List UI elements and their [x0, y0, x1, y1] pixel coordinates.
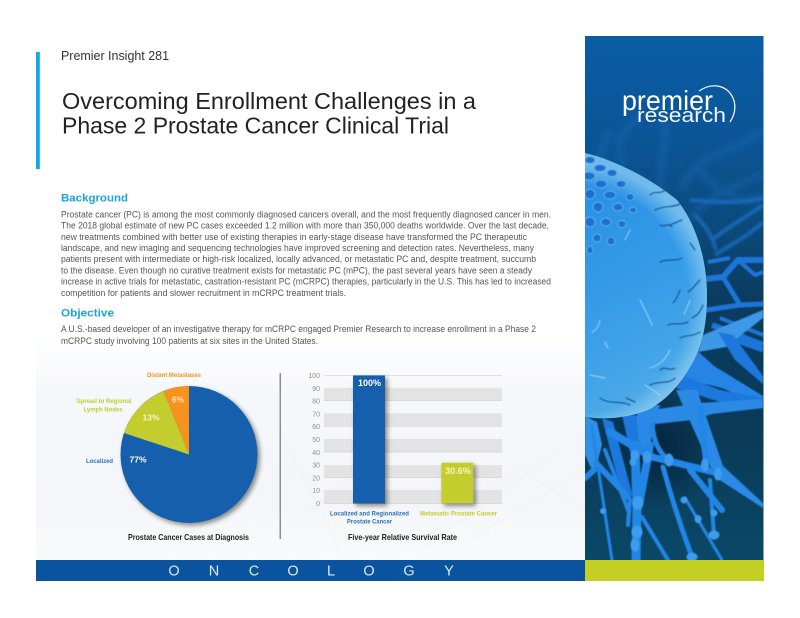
footer label: N	[209, 564, 219, 580]
logo: premier research	[622, 85, 735, 127]
footer label: C	[249, 564, 259, 580]
bar values: 100%	[358, 378, 381, 388]
bar chart: five-year relative survival rate	[308, 373, 502, 542]
text block: background: landscape, and new imaging and sequencing technologies have improved screening and detection rates. Nevertheless, many	[61, 243, 534, 253]
surface bumps	[583, 156, 636, 254]
slice labels: Distant Metastases	[147, 372, 201, 379]
text block: objective: mCRPC study involving 100 patients at six sites in the United States.	[61, 336, 318, 346]
category labels: Localized and Regionalized	[330, 510, 409, 518]
series label: Premier Insight 281	[61, 49, 169, 63]
axis values: 30	[312, 463, 320, 470]
bar caption: Five-year Relative Survival Rate	[348, 532, 457, 542]
footer label: Y	[444, 564, 454, 580]
spikes	[585, 310, 763, 508]
footer label: L	[327, 564, 335, 580]
text block: background: increase in active trials for metastatic, castration-resistant PC (mCRPC) therapies, particularly in the U.S. This has led to increased	[61, 276, 551, 286]
bar: localized	[353, 376, 385, 504]
axis values: 0	[316, 501, 320, 508]
pie slices	[120, 386, 258, 523]
axis values: 50	[312, 437, 320, 444]
heading: objective: Objective	[61, 308, 114, 320]
title: Phase 2 Prostate Cancer Clinical Trial	[62, 112, 449, 138]
footer label	[168, 564, 454, 580]
tendril nodes	[600, 450, 722, 562]
tendrils	[585, 408, 722, 560]
sphere	[585, 153, 707, 418]
bar: metastatic	[441, 463, 473, 504]
accent bar	[36, 52, 40, 169]
slice values: 77%	[129, 454, 147, 464]
axis values: 10	[312, 488, 320, 495]
slice labels: Lymph Nodes	[84, 406, 123, 414]
title: Overcoming Enrollment Challenges in a	[62, 88, 477, 114]
axis values	[308, 373, 320, 508]
axis values: 70	[312, 411, 320, 418]
footer label: G	[403, 564, 415, 580]
axis values: 90	[312, 386, 320, 393]
upper-right strands	[690, 198, 763, 255]
background network	[602, 105, 763, 220]
slice values: 6%	[172, 394, 185, 404]
text block: objective	[61, 324, 536, 346]
title	[62, 88, 477, 138]
slice values	[129, 394, 185, 464]
category labels	[330, 510, 497, 526]
axis values: 60	[312, 424, 320, 431]
text block: objective: A U.S.-based developer of an investigative therapy for mCRPC engaged Premier Research to increase enrollment in a Phase 2	[61, 324, 536, 334]
bar values	[358, 378, 471, 476]
footer label: O	[363, 564, 375, 580]
footer label: O	[168, 564, 180, 580]
image panel: cancer cell	[583, 36, 764, 562]
text block: background: patients present with intermediate or high-risk localized, locally advanced, or metastatic PC and, despite treatment, succumb	[61, 254, 536, 264]
logo: premier research: research	[637, 105, 726, 127]
footer band	[36, 560, 764, 581]
text block: background: to the disease. Even though no curative treatment exists for metastatic PC (mPC), the past several years have seen a steady	[61, 265, 532, 275]
slice labels: Spread to Regional	[76, 398, 132, 405]
axis values: 40	[312, 450, 320, 457]
logo: premier research: premier	[622, 85, 713, 116]
axis values: 20	[312, 475, 320, 482]
text block: background: The 2018 global estimate of new PC cases exceeded 1.2 million with more than 350,000 deaths worldwide. Over the last decade,	[61, 221, 549, 231]
pie chart: prostate cancer cases at diagnosis	[76, 372, 258, 542]
text block: background: new treatments combined with better use of existing therapies in early-stage disease have transformed the PC therapeutic	[61, 232, 527, 242]
surface squiggles	[600, 170, 703, 405]
text block: background: Prostate cancer (PC) is among the most commonly diagnosed cancers overall, and the most frequently diagnosed cancer in men.	[61, 210, 551, 220]
axis values: 100	[308, 373, 320, 380]
mesh strands	[706, 258, 763, 350]
axis values: 80	[312, 399, 320, 406]
chart bands	[324, 388, 502, 503]
category labels: Metastatic Prostate Cancer	[420, 510, 497, 518]
text block: background: competition for patients and slower recruitment in mCRPC treatment trials.	[61, 288, 346, 298]
slice labels	[76, 372, 201, 465]
slice labels: Localized	[86, 458, 113, 465]
footer label: O	[287, 564, 299, 580]
bar values: 30.6%	[445, 466, 471, 476]
slice values: 13%	[142, 412, 160, 422]
category labels: Prostate Cancer	[347, 518, 392, 526]
pie caption: Prostate Cancer Cases at Diagnosis	[128, 532, 249, 542]
heading: background: Background	[61, 192, 128, 204]
text block: background	[61, 210, 551, 298]
